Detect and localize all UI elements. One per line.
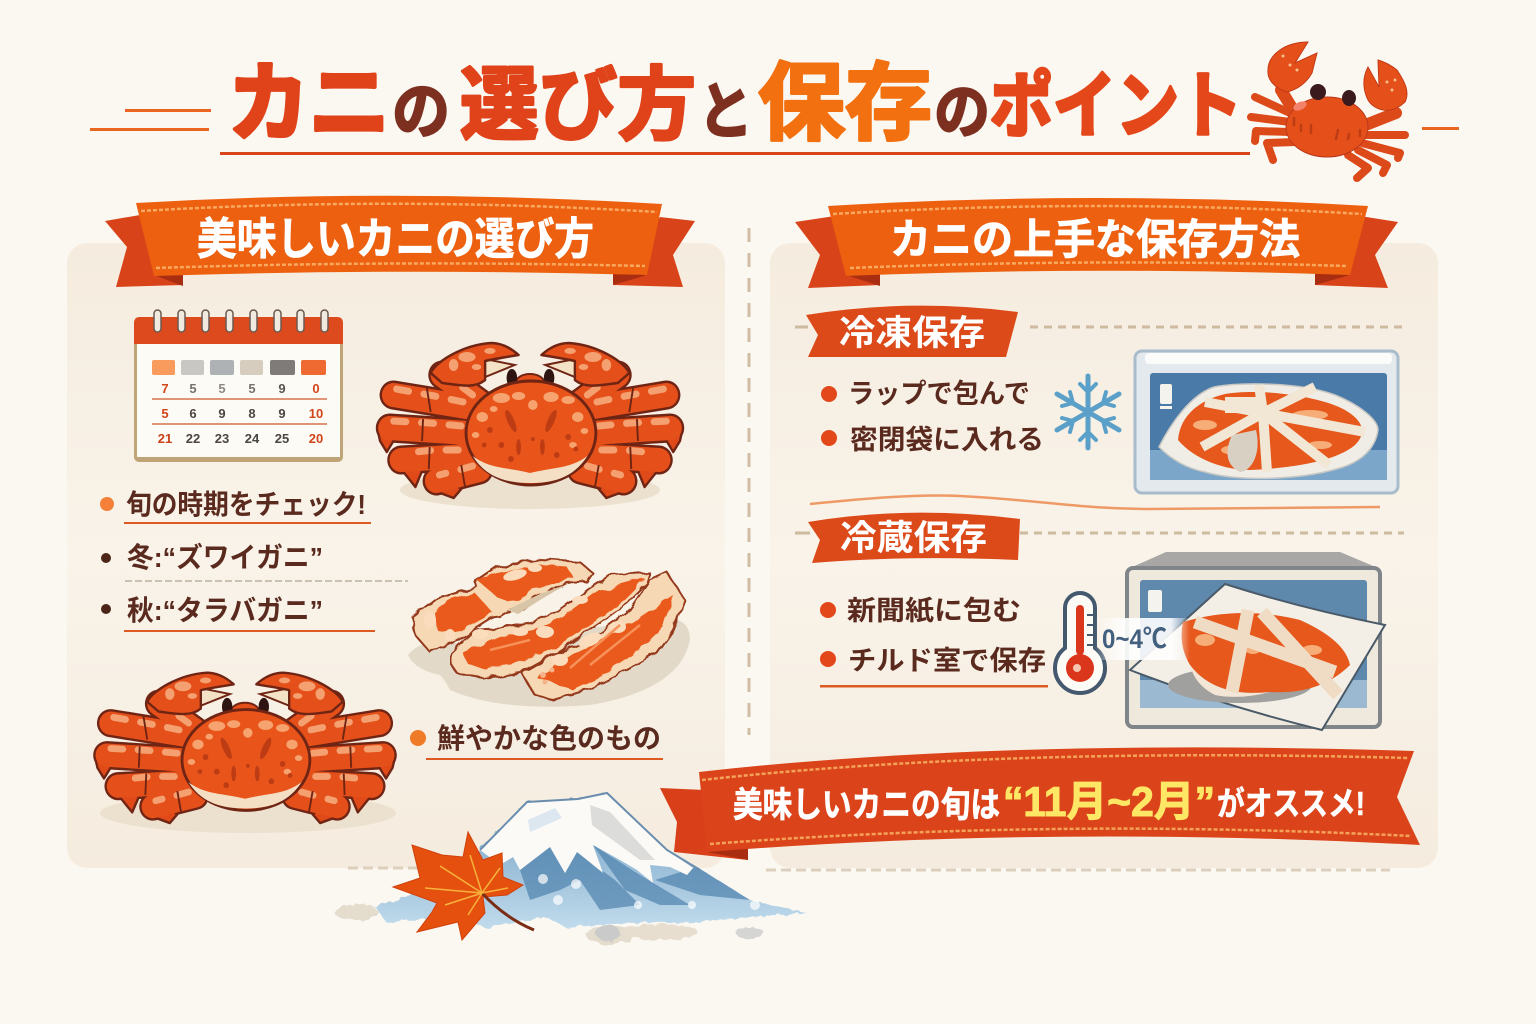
list: refrigerated steps bbox=[820, 596, 1048, 688]
calendar numbers: 10 bbox=[309, 406, 323, 421]
icon: maple leaf bbox=[393, 832, 534, 940]
icon: snowflake bbox=[1057, 376, 1119, 448]
icon: calendar bbox=[134, 310, 343, 462]
title: 保存 bbox=[758, 57, 932, 152]
title: の bbox=[934, 79, 990, 146]
calendar numbers: 5 bbox=[189, 381, 197, 396]
title: と bbox=[698, 78, 753, 147]
heading text: カニの上手な保存方法 bbox=[890, 216, 1300, 263]
ribbon heading: storage bbox=[795, 198, 1398, 288]
title: カニ bbox=[228, 56, 390, 152]
list: frozen steps: 密閉袋に入れる bbox=[850, 425, 1044, 455]
icon: small crab bbox=[1251, 42, 1407, 178]
illustration: snow crab bbox=[377, 343, 683, 509]
calendar numbers: 5 bbox=[218, 381, 226, 396]
title accent right bbox=[1422, 127, 1459, 130]
bullet: autumn king crab bbox=[101, 595, 375, 632]
banner message: “11月~2月” bbox=[1003, 778, 1215, 825]
title: 選び方 bbox=[460, 61, 696, 150]
banner message: 美味しいカニの旬は bbox=[733, 786, 1000, 825]
calendar numbers: 0 bbox=[312, 381, 320, 396]
colour swatches bbox=[152, 360, 326, 375]
illustration: king crab legs bbox=[408, 559, 690, 707]
illustration: whole red crab bbox=[95, 673, 396, 833]
list: refrigerated steps: チルド室で保存 bbox=[848, 646, 1046, 676]
bottom banner bbox=[660, 747, 1420, 860]
banner message: がオススメ! bbox=[1217, 785, 1365, 822]
calendar numbers: 22 bbox=[186, 431, 200, 446]
calendar numbers bbox=[158, 381, 323, 446]
dashed separator bbox=[125, 580, 408, 582]
sub-heading: refrigerated storage bbox=[795, 513, 1404, 563]
calendar numbers: 5 bbox=[161, 406, 169, 421]
calendar numbers: 9 bbox=[278, 406, 286, 421]
list: frozen steps bbox=[821, 379, 1044, 455]
banner message bbox=[733, 778, 1365, 825]
title underline bbox=[220, 152, 1250, 155]
binder rings bbox=[154, 310, 328, 332]
wavy divider bbox=[810, 495, 1380, 509]
calendar numbers: 25 bbox=[275, 431, 289, 446]
panel: how to choose background bbox=[67, 243, 725, 868]
title: ポイント bbox=[990, 67, 1242, 147]
sub-heading: frozen storage bbox=[795, 306, 1404, 357]
sub-heading: frozen storage: 冷凍保存 bbox=[839, 314, 985, 353]
calendar numbers: 23 bbox=[215, 431, 229, 446]
bullet: vivid colour: 鮮やかな色のもの bbox=[437, 723, 661, 754]
illustration: refrigerator with newspaper-wrapped crab bbox=[1127, 552, 1385, 730]
icon: thermometer bbox=[1055, 593, 1105, 693]
ribbon heading: how to choose bbox=[105, 196, 695, 287]
illustration: freezer with wrapped crab bbox=[1135, 351, 1398, 493]
temperature label: 0~4℃ bbox=[1102, 624, 1167, 654]
column divider bbox=[748, 228, 750, 735]
title: の bbox=[392, 78, 450, 147]
title bbox=[228, 56, 1242, 152]
calendar numbers: 8 bbox=[248, 406, 256, 421]
calendar numbers: 9 bbox=[278, 381, 286, 396]
calendar numbers: 5 bbox=[248, 381, 256, 396]
panel: how to store background bbox=[770, 243, 1438, 868]
list: refrigerated steps: 新聞紙に包む bbox=[847, 596, 1021, 626]
bullet: check season: 旬の時期をチェック! bbox=[126, 489, 366, 520]
temperature label bbox=[1095, 618, 1190, 660]
title accents left bbox=[90, 109, 211, 131]
calendar numbers: 21 bbox=[158, 431, 172, 446]
heading text: 美味しいカニの選び方 bbox=[197, 215, 594, 264]
calendar numbers: 7 bbox=[161, 381, 169, 396]
calendar numbers: 20 bbox=[309, 431, 323, 446]
bullet: winter snow crab: 冬:“ズワイガニ” bbox=[127, 541, 323, 573]
calendar numbers: 24 bbox=[245, 431, 260, 446]
illustration: Mount Fuji bbox=[334, 793, 807, 944]
horizontal dashes behind Fuji bbox=[348, 868, 1390, 870]
calendar numbers: 6 bbox=[189, 406, 197, 421]
list: frozen steps: ラップで包んで bbox=[848, 379, 1030, 409]
bullet: autumn king crab: 秋:“タラバガニ” bbox=[127, 595, 323, 626]
calendar numbers: 9 bbox=[218, 406, 226, 421]
sub-heading: refrigerated storage: 冷蔵保存 bbox=[840, 519, 987, 558]
